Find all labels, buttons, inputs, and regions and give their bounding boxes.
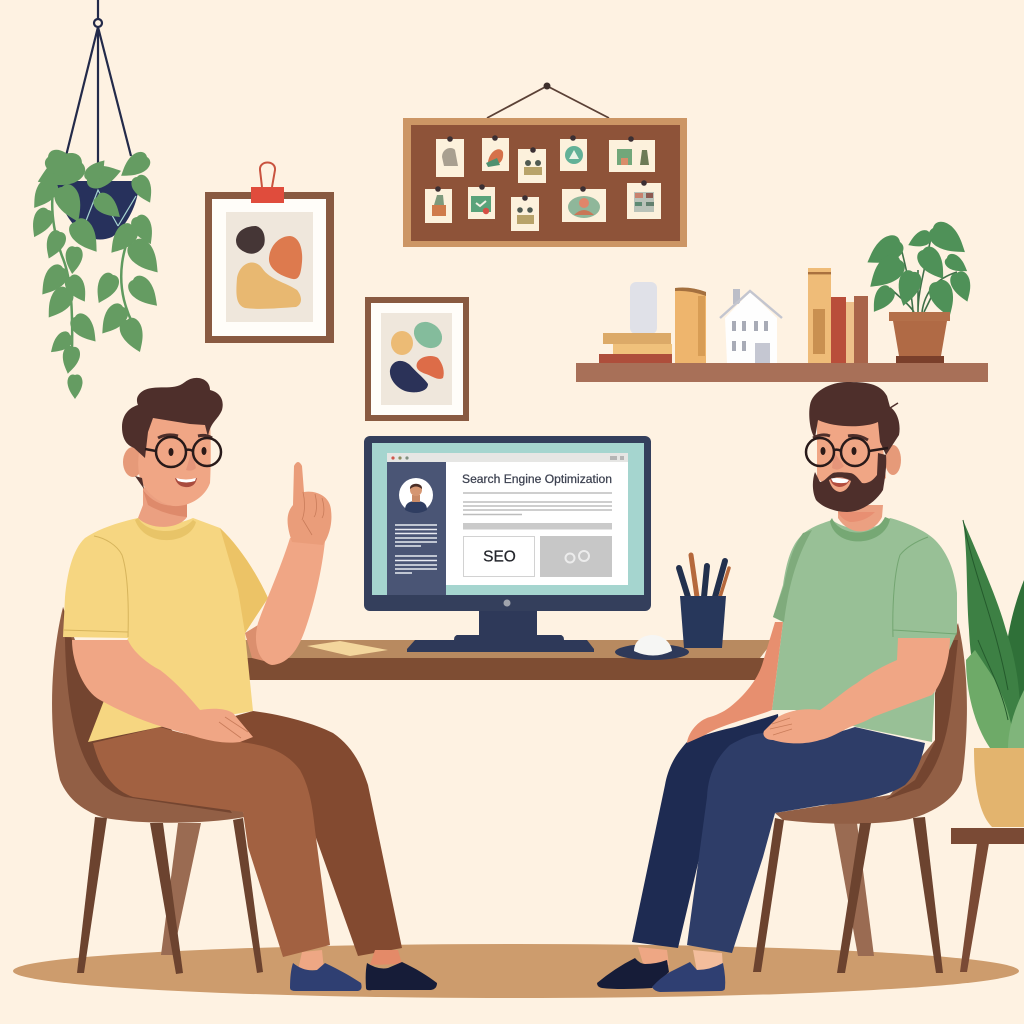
chair left <box>52 607 263 974</box>
pins <box>435 135 647 201</box>
hair <box>122 378 223 458</box>
pen cup <box>679 555 729 648</box>
SEO button: SEO <box>483 548 516 566</box>
near leg trousers <box>687 727 925 953</box>
computer monitor <box>364 436 651 652</box>
plant pot <box>974 748 1024 827</box>
planter cords <box>66 0 131 183</box>
potted plant right <box>963 520 1024 827</box>
eyes <box>168 447 206 456</box>
browser title bar <box>387 453 628 463</box>
stacked books and jar <box>599 282 672 363</box>
pens <box>679 555 729 597</box>
chair right <box>753 623 967 973</box>
near leg trousers <box>93 727 330 957</box>
resting arm <box>72 640 253 743</box>
small framed art <box>365 297 469 421</box>
neck <box>138 487 187 527</box>
image placeholder <box>540 536 612 577</box>
chair back legs <box>161 823 201 955</box>
far leg trousers <box>235 711 402 956</box>
framed art with binder clip <box>205 162 334 343</box>
page title: Search Engine Optimization <box>462 472 612 486</box>
vines <box>52 190 133 352</box>
collar <box>830 517 890 541</box>
potted plant on shelf <box>861 218 976 363</box>
shoes <box>597 947 725 992</box>
yellow shirt <box>63 518 268 742</box>
mouse on pad <box>615 635 689 660</box>
red binder clip <box>251 162 284 203</box>
monitor stand <box>407 610 594 652</box>
eyebrows <box>158 435 212 438</box>
nose <box>832 452 844 470</box>
note pictures <box>432 146 654 224</box>
cork board <box>403 82 687 247</box>
planter pot <box>57 181 139 240</box>
avatar <box>399 478 433 513</box>
face <box>817 418 886 505</box>
chair front legs <box>77 817 263 974</box>
sidebar text lines <box>395 525 437 573</box>
upright books <box>808 268 868 363</box>
mouth <box>175 478 197 487</box>
left bent arm <box>687 622 783 743</box>
pointing hand <box>288 462 331 545</box>
collar <box>135 518 196 540</box>
ear <box>885 445 901 475</box>
green shirt <box>772 518 957 742</box>
power button <box>504 600 510 606</box>
large plant leaves <box>963 520 1024 748</box>
page text lines <box>463 493 612 514</box>
resting arm <box>763 638 950 743</box>
desk <box>245 640 774 680</box>
beard <box>813 453 886 512</box>
wall shelf <box>576 218 988 382</box>
raised arm <box>245 462 331 665</box>
pinned notes <box>425 135 661 231</box>
page content area <box>446 462 628 585</box>
nose <box>186 450 196 471</box>
art shapes <box>390 317 447 392</box>
hair <box>809 382 900 455</box>
ear <box>123 447 143 477</box>
leaning tall book <box>675 288 706 363</box>
shoes <box>290 950 437 991</box>
floor rug <box>13 944 1019 998</box>
neck <box>838 505 883 531</box>
face <box>138 418 211 506</box>
glasses <box>806 438 888 466</box>
side table <box>951 828 1024 972</box>
man on right with green shirt <box>597 382 967 992</box>
mouth and chin <box>829 477 851 492</box>
eyebrows <box>813 435 868 440</box>
SEO button <box>464 536 534 576</box>
hanger <box>487 82 609 118</box>
man on left with yellow shirt <box>52 378 437 991</box>
hanging plant <box>26 0 167 399</box>
pothos leaves <box>26 146 167 399</box>
art shapes <box>236 226 302 309</box>
head left <box>122 378 223 540</box>
far leg trousers <box>632 714 780 948</box>
head right <box>806 382 901 541</box>
note paper on desk <box>307 641 388 656</box>
small white house <box>720 289 782 363</box>
sidebar <box>387 462 446 595</box>
glasses <box>145 437 221 467</box>
eyes <box>820 447 856 455</box>
